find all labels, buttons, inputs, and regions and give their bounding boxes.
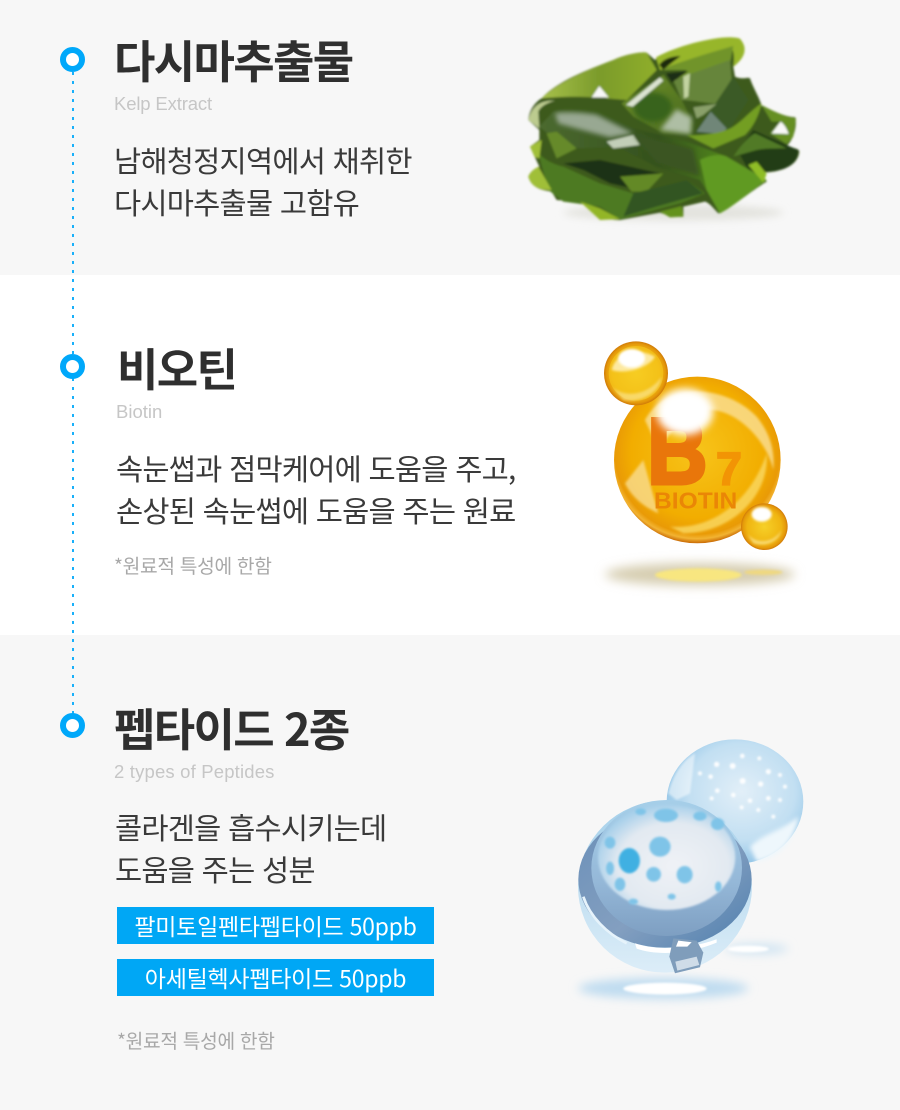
B7 lettering — [647, 399, 742, 514]
image: biotin B7 capsule — [602, 341, 798, 592]
section: kelp text — [114, 26, 412, 223]
description: peptides: 콜라겐을 흡수시키는데 — [115, 806, 386, 848]
inner dome — [591, 800, 742, 936]
description: biotin: 속눈썹과 점막케어에 도움을 주고, — [116, 447, 515, 489]
small bubble bottom-right — [741, 503, 788, 550]
description: peptides — [115, 806, 386, 890]
small bubble top-left — [604, 341, 668, 405]
description: kelp: 다시마추출물 고함유 — [114, 181, 359, 223]
back sphere — [667, 739, 803, 864]
section: peptides text — [114, 694, 386, 1054]
description: peptides: 도움을 주는 성분 — [115, 848, 315, 890]
bottom frond — [538, 153, 705, 219]
description: kelp: 남해청정지역에서 채취한 — [114, 139, 412, 181]
clasp — [669, 938, 703, 973]
english subtitle: peptides: 2 types of Peptides — [114, 761, 275, 782]
english subtitle: biotin: Biotin — [116, 401, 162, 422]
B7 lettering: BIOTIN — [654, 488, 737, 514]
front sphere outer shell — [578, 801, 752, 973]
description: kelp — [114, 139, 412, 223]
capsule shadow — [605, 563, 795, 586]
english subtitle: kelp: Kelp Extract — [114, 93, 212, 114]
description: biotin — [116, 447, 516, 531]
tag: acetyl hexapeptide: 아세틸헥사펩타이드 50ppb — [145, 960, 406, 994]
section: biotin text — [114, 334, 516, 579]
timeline marker: biotin — [60, 354, 85, 379]
footnote: peptides: *원료적 특성에 한함 — [117, 1026, 275, 1054]
heading: peptides: 펩타이드 2종 — [114, 694, 349, 759]
timeline marker: peptides — [60, 713, 85, 738]
image: peptide spheres — [577, 739, 804, 1004]
main diagonal frond — [539, 111, 757, 213]
tag: palmitoyl pentapeptide: 팔미토일펜타펩타이드 50ppb — [134, 908, 417, 942]
heading: biotin: 비오틴 — [117, 334, 236, 399]
B7 lettering: 7 — [716, 442, 742, 494]
description: biotin: 손상된 속눈썹에 도움을 주는 원료 — [116, 489, 516, 531]
timeline marker: kelp — [60, 47, 85, 72]
large capsule — [614, 377, 781, 543]
centre frond — [622, 75, 693, 135]
footnote: biotin: *원료적 특성에 한함 — [114, 551, 272, 579]
image: kelp seaweed — [526, 36, 801, 222]
kelp silhouette — [528, 38, 799, 220]
B7 lettering: B — [647, 399, 707, 503]
kelp shadow — [563, 205, 783, 221]
upper light fronds — [542, 52, 657, 100]
right folds — [695, 77, 748, 133]
timeline dotted line — [72, 72, 74, 717]
front sphere dark band — [578, 811, 752, 948]
shadows — [578, 978, 748, 999]
heading: kelp extract: 다시마추출물 — [114, 26, 353, 91]
